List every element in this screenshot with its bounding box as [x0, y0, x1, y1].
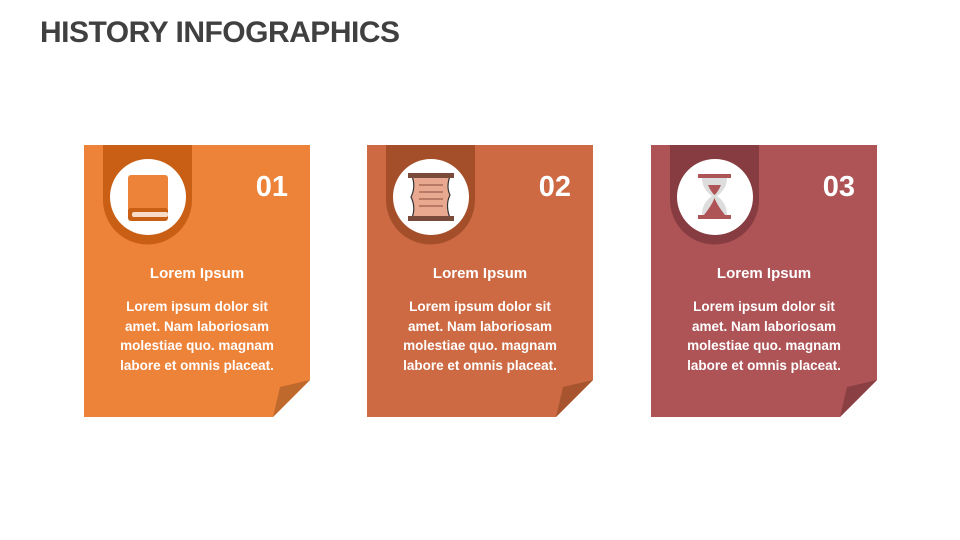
- panel: card 01: [84, 145, 310, 417]
- panel: card 02: [367, 145, 593, 417]
- text: amet. Nam laboriosam: [125, 318, 269, 334]
- text: labore et omnis placeat.: [403, 358, 557, 372]
- text: labore et omnis placeat.: [687, 358, 841, 372]
- panel: card 03: [651, 145, 877, 417]
- number 01: 01: [256, 171, 288, 203]
- heading: Lorem Ipsum: [717, 265, 811, 282]
- title: HISTORY INFOGRAPHICS: [40, 16, 400, 49]
- text: Lorem ipsum dolor sit: [693, 299, 835, 314]
- text: amet. Nam laboriosam: [692, 318, 836, 334]
- text: [687, 299, 841, 373]
- number 02: 02: [539, 171, 571, 203]
- text: labore et omnis placeat.: [120, 358, 274, 372]
- text: Lorem ipsum dolor sit: [126, 299, 268, 314]
- text: molestiae quo. magnam: [120, 338, 274, 353]
- text: [403, 299, 557, 373]
- number 03: 03: [823, 171, 855, 203]
- text: amet. Nam laboriosam: [408, 318, 552, 334]
- heading: Lorem Ipsum: [150, 265, 244, 282]
- text: [120, 299, 274, 373]
- text: molestiae quo. magnam: [403, 338, 557, 353]
- text: Lorem ipsum dolor sit: [409, 299, 551, 314]
- heading: Lorem Ipsum: [433, 265, 527, 282]
- text: molestiae quo. magnam: [687, 338, 841, 353]
